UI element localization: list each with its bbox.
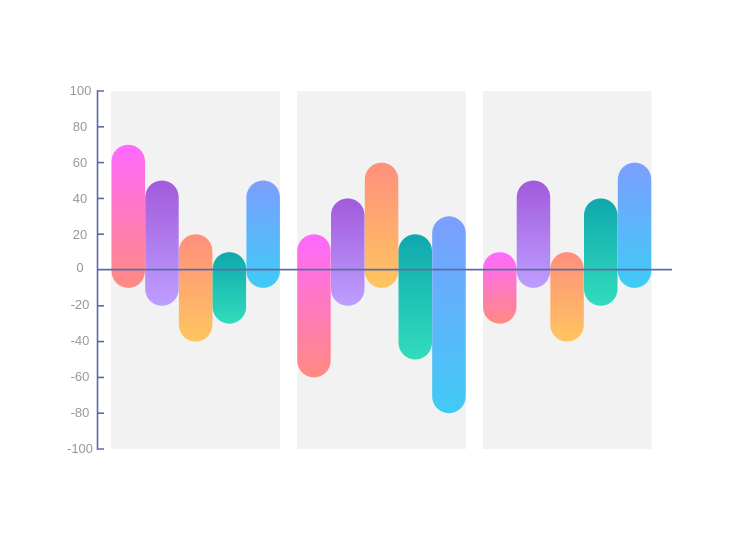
y axis labels: 0 bbox=[76, 260, 84, 275]
y axis labels: -100 bbox=[67, 441, 93, 456]
panel: group 2 background bbox=[297, 91, 466, 449]
panel: group 3 background bbox=[483, 91, 652, 449]
y axis labels: 60 bbox=[73, 155, 87, 170]
y axis labels bbox=[67, 83, 93, 456]
y axis labels: 20 bbox=[73, 227, 87, 242]
y axis labels: 40 bbox=[73, 191, 87, 206]
bars: group 2 bbox=[297, 163, 466, 413]
y axis labels: 100 bbox=[70, 83, 91, 98]
y axis labels: 80 bbox=[73, 119, 87, 134]
y axis labels: -60 bbox=[71, 369, 89, 384]
zero baseline bbox=[97, 269, 672, 271]
panel: group 1 background bbox=[111, 91, 280, 449]
y axis labels: -80 bbox=[71, 405, 89, 420]
bars: group 1 bbox=[112, 145, 280, 342]
y axis labels: -40 bbox=[71, 333, 89, 348]
y axis labels: -20 bbox=[71, 297, 89, 312]
y axis with ticks bbox=[98, 91, 104, 449]
bars: group 3 bbox=[483, 163, 651, 342]
